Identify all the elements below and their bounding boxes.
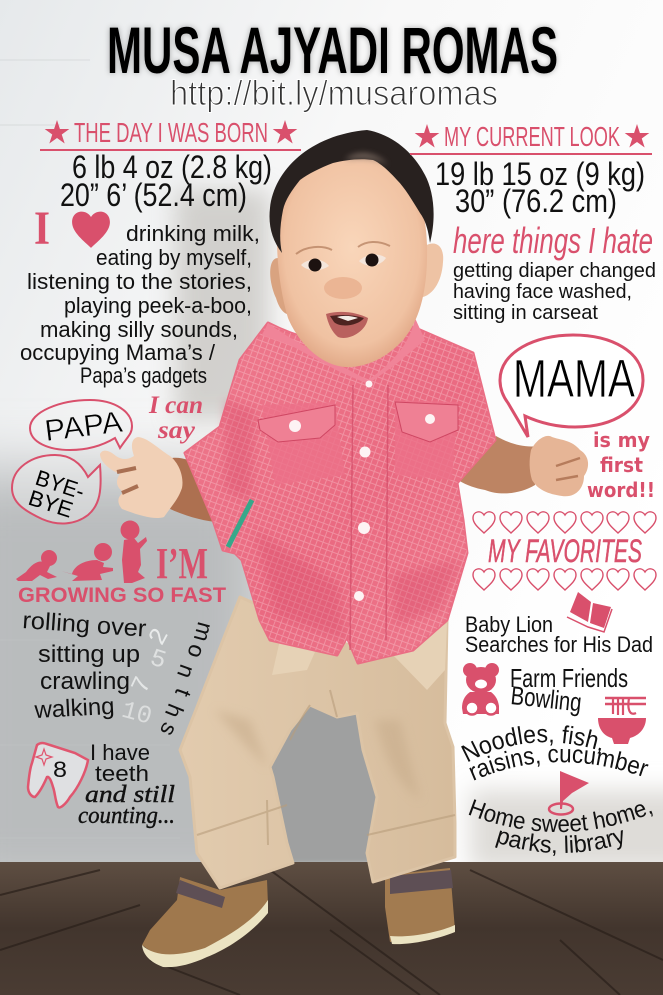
milestones list: sitting up xyxy=(38,641,140,668)
speech bubble: BYE-BYE xyxy=(12,455,101,524)
speech bubble: PAPA: PAPA xyxy=(43,406,124,448)
milestone months numbers: 2 xyxy=(143,624,176,650)
url: http://bit.ly/musaromas xyxy=(170,74,498,113)
list of loves: eating by myself, xyxy=(96,245,252,270)
list of loves: drinking milk, xyxy=(126,221,260,246)
icon: tooth: 8 xyxy=(53,757,67,782)
birth weight and length xyxy=(60,149,272,213)
icon: standing baby silhouette xyxy=(120,520,147,583)
favorite places text xyxy=(468,799,653,856)
panel: my favorites xyxy=(461,511,657,856)
first word caption: is my xyxy=(593,428,650,452)
speech bubble: BYE-BYE: BYE- xyxy=(32,465,88,504)
list of hates: getting diaper changed xyxy=(453,259,656,282)
icon: lying baby silhouette xyxy=(16,550,57,581)
I love heading xyxy=(34,202,110,255)
milestones list: crawling xyxy=(40,668,130,695)
list of hates xyxy=(453,259,656,324)
favorite book text: Baby Lion xyxy=(465,612,553,637)
milestones list: walking xyxy=(33,693,115,724)
panel: my current look xyxy=(410,121,652,219)
favorite toys text: Farm Friends xyxy=(510,663,628,693)
I can say caption: I can xyxy=(148,392,203,419)
months curved label: h xyxy=(160,700,189,722)
favorite places text: Home sweet home, xyxy=(468,799,653,832)
first word caption: word!! xyxy=(587,478,655,502)
milestone months numbers: 5 xyxy=(146,644,170,676)
teeth caption xyxy=(90,740,150,786)
months curved label: o xyxy=(182,641,211,662)
wooden floor xyxy=(0,862,663,995)
left shoe xyxy=(142,877,268,967)
milestone months numbers: 10 xyxy=(118,696,155,732)
months curved label: t xyxy=(170,685,197,701)
list of loves: occupying Mama’s / xyxy=(20,340,216,365)
speech bubble: BYE-BYE: BYE xyxy=(25,485,76,523)
current weight and length xyxy=(435,156,645,219)
shirt xyxy=(185,318,495,663)
icon: book xyxy=(567,592,612,632)
list of hates: having face washed, xyxy=(453,280,632,303)
panel: I love xyxy=(20,202,260,388)
list of hates: sitting in carseat xyxy=(453,301,598,324)
icon: crawling baby silhouette xyxy=(61,543,113,581)
heading: the day I was born: THE DAY I WAS BORN xyxy=(74,117,268,148)
panel: the day I was born xyxy=(40,117,301,213)
and still counting: counting... xyxy=(78,803,175,829)
right shoe xyxy=(385,868,455,944)
ears xyxy=(270,244,443,314)
heading: I'M: I’M xyxy=(156,539,208,588)
months curved label: n xyxy=(172,661,201,682)
favorite foods text: Noodles, fish, xyxy=(461,725,602,762)
birth weight and length: 20” 6’ (52.4 cm) xyxy=(60,177,247,213)
favorite book text xyxy=(465,612,653,657)
baby photo illustration xyxy=(100,130,588,967)
speech bubble: PAPA xyxy=(30,400,132,450)
favorite foods text xyxy=(461,725,648,780)
list of loves: making silly sounds, xyxy=(40,317,238,342)
favorite places text: parks, library xyxy=(495,830,623,856)
heading: the day I was born xyxy=(40,117,301,151)
heart row bottom xyxy=(473,569,656,590)
panel: things I hate xyxy=(453,220,656,324)
panel: teeth xyxy=(28,740,175,829)
baby right arm and hand xyxy=(458,436,588,496)
first word caption xyxy=(587,428,655,502)
panel: growing so fast xyxy=(16,520,226,741)
favorite toys text: Bowling xyxy=(509,680,583,717)
icon: teddy bear xyxy=(462,663,499,714)
pants xyxy=(180,597,455,888)
list of loves: listening to the stories, xyxy=(27,269,252,294)
list of loves xyxy=(20,221,260,388)
and still counting xyxy=(78,782,175,829)
months curved label: m xyxy=(189,619,219,645)
milestones list xyxy=(22,607,147,724)
milestones list: rolling over xyxy=(22,607,147,643)
and still counting: and still xyxy=(85,782,175,808)
icon: flag xyxy=(549,771,589,814)
I can say caption xyxy=(148,392,203,444)
speech bubble: MAMA xyxy=(500,335,643,437)
list of loves: Papa’s gadgets xyxy=(80,363,207,388)
first word caption: first xyxy=(600,453,643,477)
milestone months numbers: 7 xyxy=(126,672,158,698)
icon: noodle bowl xyxy=(598,698,646,744)
teeth caption: teeth xyxy=(95,761,149,786)
teeth caption: I have xyxy=(90,740,150,765)
birth weight and length: 6 lb 4 oz (2.8 kg) xyxy=(72,149,272,185)
current weight and length: 30” (76.2 cm) xyxy=(455,183,617,219)
face xyxy=(277,150,427,367)
list of loves: playing peek-a-boo, xyxy=(64,293,252,318)
icon: tooth xyxy=(28,743,88,807)
heading: growing so fast: GROWING SO FAST xyxy=(18,584,226,607)
baby left arm and hand xyxy=(100,437,220,522)
I can say caption: say xyxy=(157,417,196,444)
months curved label: s xyxy=(155,719,183,741)
heart row top xyxy=(473,512,656,533)
milestone months numbers xyxy=(118,624,176,732)
favorite foods text: raisins, cucumber xyxy=(469,748,648,780)
I love heading: I xyxy=(34,202,50,255)
months curved label xyxy=(155,619,219,741)
favorite toys text xyxy=(509,663,628,717)
hair xyxy=(270,130,434,253)
